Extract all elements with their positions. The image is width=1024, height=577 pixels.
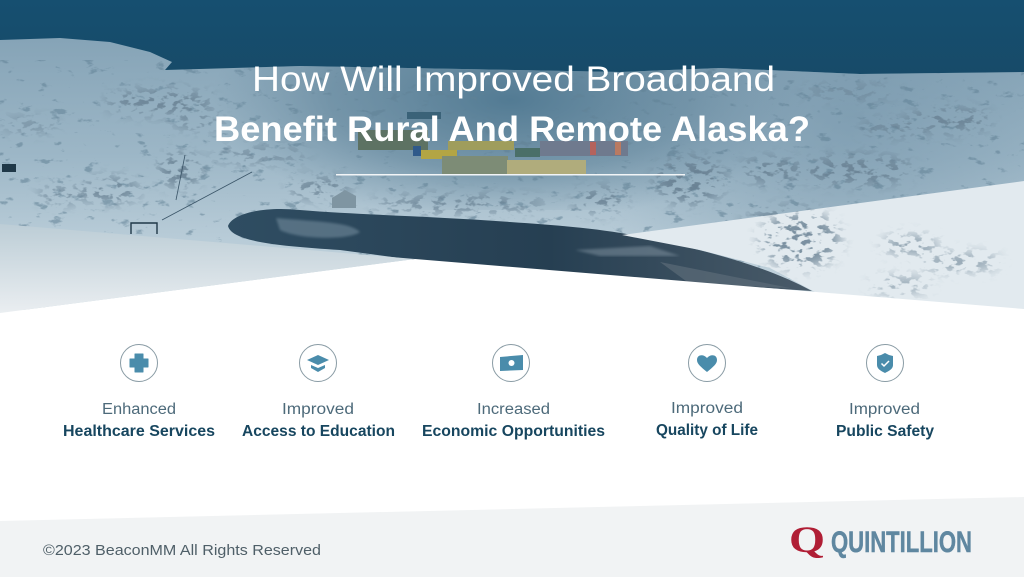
title line 1: How Will Improved Broadband	[252, 60, 775, 99]
icon: heart	[688, 344, 726, 382]
title underline	[336, 174, 685, 176]
label: improved access to education: Access to Education	[242, 423, 395, 440]
label: improved access to education	[242, 401, 395, 440]
label: increased economic opportunities: Increased	[477, 401, 550, 418]
lighter snow wedge on the right	[620, 180, 1024, 310]
logo: Quintillion	[789, 520, 972, 561]
footer band	[0, 497, 1024, 577]
logo wordmark: QUINTILLION	[831, 526, 972, 559]
label: improved quality of life	[656, 400, 758, 439]
background photo: snowy Alaskan village	[0, 0, 1024, 310]
title line 2: Benefit Rural And Remote Alaska?	[214, 110, 810, 149]
village buildings	[358, 112, 628, 175]
benefit: healthcare	[63, 344, 215, 440]
shoreline house	[332, 190, 356, 208]
label: increased economic opportunities: Economic Opportunities	[422, 423, 605, 440]
goal frame structure	[131, 223, 157, 234]
fence	[162, 155, 252, 220]
label: improved quality of life: Improved	[671, 400, 743, 417]
copyright: ©2023 BeaconMM All Rights Reserved	[43, 542, 321, 559]
frozen bay	[228, 209, 812, 291]
benefit: quality of life	[656, 344, 758, 439]
benefit: public safety	[836, 344, 934, 440]
snow covered hills	[0, 38, 1024, 310]
label: enhanced healthcare services	[63, 401, 215, 440]
sparse rocky texture	[0, 60, 1024, 310]
icon: shield with check	[866, 344, 904, 382]
logo mark: red Q: Q	[789, 520, 825, 561]
label: increased economic opportunities	[422, 401, 605, 440]
label: enhanced healthcare services: Enhanced	[102, 401, 176, 418]
icon: banknote	[492, 344, 530, 382]
title	[214, 60, 810, 149]
label: improved quality of life: Quality of Life	[656, 422, 758, 439]
label: improved access to education: Improved	[282, 401, 354, 418]
icon: graduation cap	[300, 344, 336, 382]
pale wedge on the left	[0, 224, 415, 313]
label: improved public safety	[836, 401, 934, 440]
small dark hut	[2, 164, 16, 172]
blue tint behind title	[249, 66, 1024, 260]
label: improved public safety: Public Safety	[836, 423, 934, 440]
benefit: economic	[422, 344, 605, 440]
white content area	[0, 259, 1024, 577]
dense rock clusters	[2, 84, 992, 219]
icon: medical cross	[120, 344, 158, 382]
benefit: education	[242, 344, 395, 440]
label: improved public safety: Improved	[849, 401, 920, 418]
sky band	[0, 0, 1024, 80]
label: enhanced healthcare services: Healthcare Services	[63, 423, 215, 440]
